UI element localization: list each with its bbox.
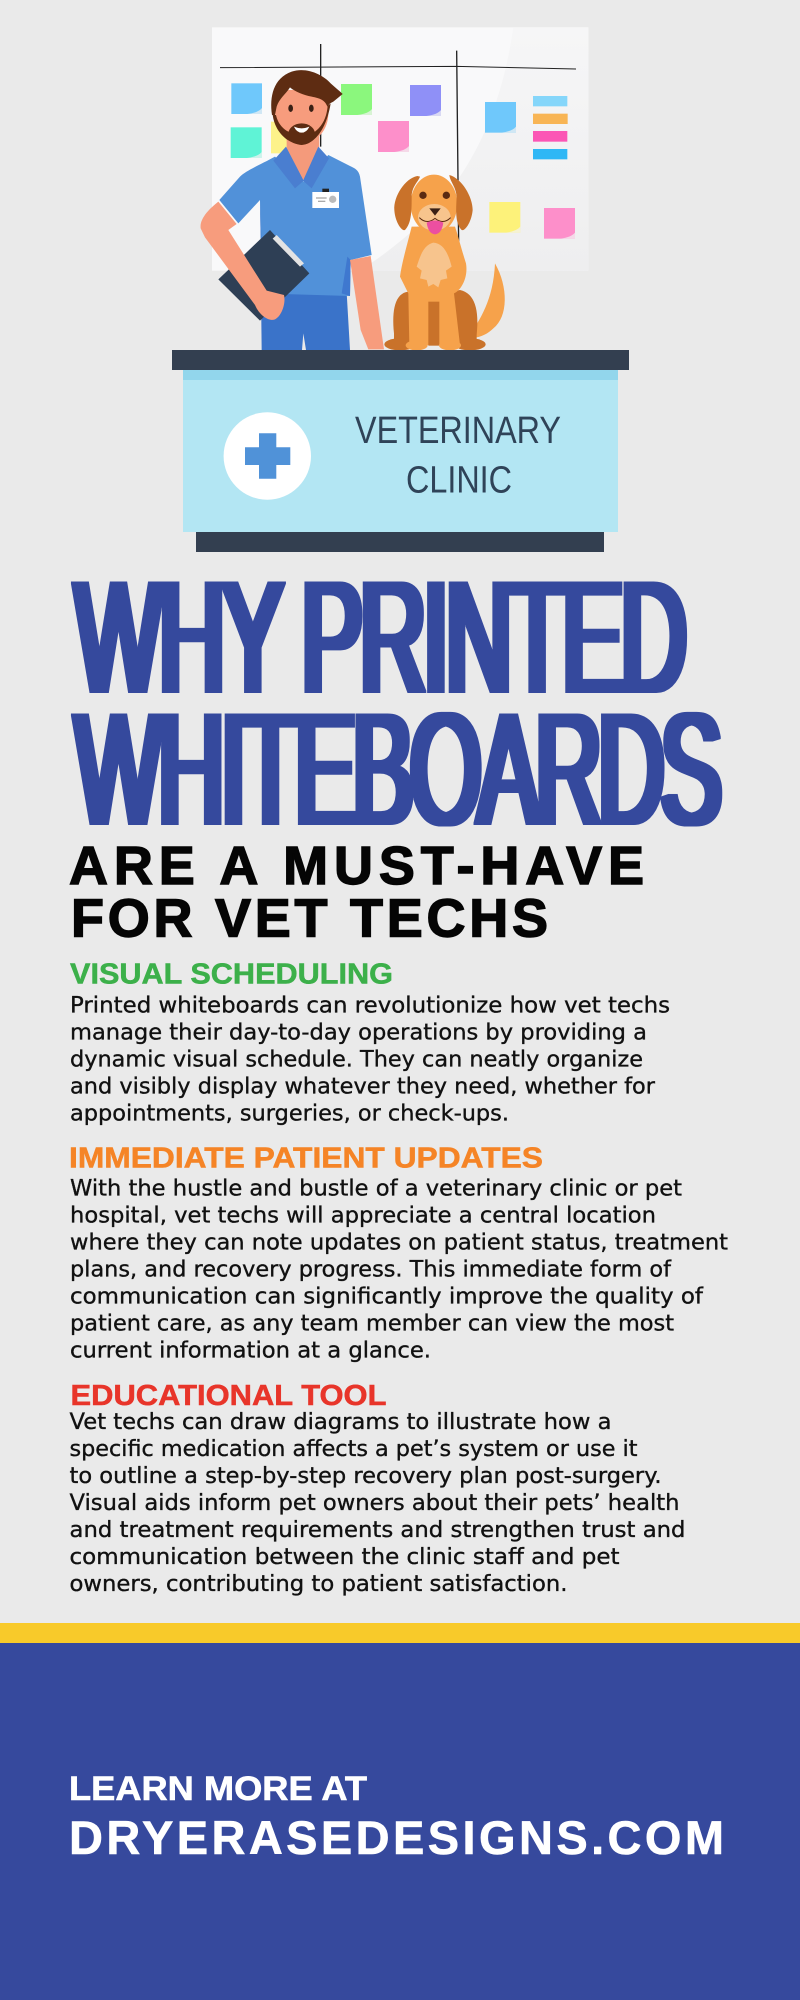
chest fur bbox=[417, 243, 452, 287]
body text: where they can note updates on patient status, treatment bbox=[70, 1231, 728, 1256]
body text: appointments, surgeries, or check-ups. bbox=[70, 1102, 509, 1127]
desk strip bbox=[183, 370, 618, 380]
desk base bbox=[196, 532, 604, 552]
body text: Printed whiteboards can revolutionize how vet techs bbox=[70, 994, 670, 1019]
body text: Vet techs can draw diagrams to illustrate how a bbox=[70, 1410, 612, 1435]
tongue bbox=[427, 220, 443, 234]
head bbox=[411, 175, 457, 233]
body text: plans, and recovery progress. This immediate form of bbox=[70, 1258, 672, 1283]
body text: to outline a step-by-step recovery plan post-surgery. bbox=[70, 1464, 662, 1489]
neck bbox=[287, 130, 319, 180]
heading: VISUAL SCHEDULING bbox=[70, 958, 393, 990]
body text: patient care, as any team member can view the most bbox=[70, 1312, 674, 1337]
body text: dynamic visual schedule. They can neatly organize bbox=[70, 1048, 643, 1073]
desk body bbox=[183, 380, 618, 532]
reception desk bbox=[172, 350, 629, 552]
section: educational tool bbox=[70, 1380, 686, 1597]
ears bbox=[394, 175, 473, 230]
call to action: LEARN MORE AT bbox=[69, 1770, 367, 1808]
clinic label bbox=[355, 410, 561, 502]
body text bbox=[70, 1177, 728, 1364]
scrubs top bbox=[219, 155, 372, 296]
muzzle bbox=[418, 204, 451, 231]
clinic label: VETERINARY bbox=[355, 410, 561, 452]
body text: owners, contributing to patient satisfaction. bbox=[70, 1572, 568, 1597]
sticky notes bbox=[231, 83, 575, 239]
body text bbox=[70, 994, 670, 1127]
footer panel bbox=[0, 1643, 800, 2000]
section: visual scheduling bbox=[70, 958, 670, 1127]
body text: With the hustle and bustle of a veterinary clinic or pet bbox=[70, 1177, 682, 1202]
whiteboard bbox=[212, 27, 588, 271]
vet tech figure bbox=[201, 70, 384, 350]
website: DRYERASEDESIGNS.COM bbox=[69, 1811, 724, 1864]
body text bbox=[70, 1410, 686, 1597]
clipboard back bbox=[218, 230, 309, 321]
body text: and visibly display whatever they need, whether for bbox=[70, 1075, 656, 1100]
title: WHITEBOARDS bbox=[75, 680, 722, 858]
dog bbox=[384, 175, 505, 350]
body text: specific medication affects a pet’s system or use it bbox=[70, 1437, 638, 1462]
collar bbox=[273, 147, 329, 188]
illustration: vet tech and dog in front of whiteboard bbox=[201, 27, 588, 350]
clipboard over shirt bbox=[243, 230, 309, 312]
lower arm bbox=[350, 256, 384, 349]
yellow band bbox=[0, 1623, 800, 1643]
body text: hospital, vet techs will appreciate a central location bbox=[70, 1204, 656, 1229]
subtitle: ARE A MUST-HAVE bbox=[69, 836, 644, 896]
body text: communication between the clinic staff and pet bbox=[70, 1545, 620, 1570]
head bbox=[271, 70, 343, 145]
section: immediate patient updates bbox=[69, 1142, 728, 1364]
body text: Visual aids inform pet owners about their pets’ health bbox=[70, 1491, 680, 1516]
body text: communication can significantly improve the quality of bbox=[70, 1285, 704, 1310]
heading: IMMEDIATE PATIENT UPDATES bbox=[69, 1142, 543, 1174]
pants bbox=[261, 293, 350, 350]
name badge bbox=[312, 189, 339, 208]
icon: medical cross bbox=[224, 412, 311, 500]
body text: current information at a glance. bbox=[70, 1339, 431, 1364]
body bbox=[400, 227, 466, 345]
title bbox=[75, 548, 722, 858]
body text: and treatment requirements and strengthen trust and bbox=[70, 1518, 686, 1543]
clinic label: CLINIC bbox=[406, 460, 512, 502]
tail bbox=[468, 263, 505, 337]
subtitle bbox=[69, 836, 644, 948]
title: WHY PRINTED bbox=[75, 548, 687, 726]
body text: manage their day-to-day operations by providing a bbox=[70, 1021, 647, 1046]
hind legs bbox=[393, 290, 477, 347]
desk top bbox=[172, 350, 629, 370]
heading: EDUCATIONAL TOOL bbox=[70, 1380, 386, 1412]
arm holding clipboard bbox=[201, 202, 284, 320]
subtitle: FOR VET TECHS bbox=[71, 888, 548, 948]
